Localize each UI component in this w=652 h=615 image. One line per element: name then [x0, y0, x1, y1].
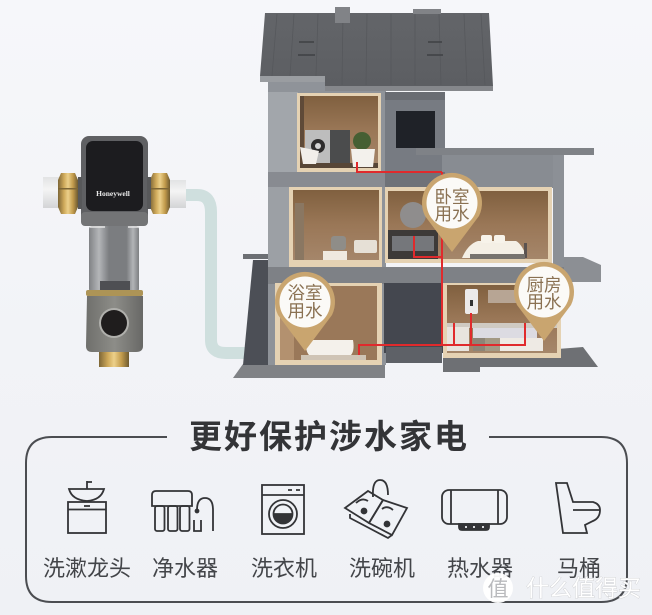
low table [323, 251, 347, 260]
washing machine [305, 130, 330, 163]
lounge chair [354, 240, 377, 253]
label: dishwasher: 洗碗机 [349, 556, 415, 581]
roof [260, 7, 493, 91]
round mirror [400, 202, 426, 228]
red water pipes [357, 162, 525, 355]
pin: bathroom [275, 272, 335, 351]
watermark: 值 [488, 578, 508, 601]
room: bedroom [385, 187, 552, 263]
icon: washing machine [262, 485, 304, 534]
basket [300, 147, 319, 164]
label: toilet: 马桶 [557, 556, 601, 581]
heading: 更好保护涉水家电 [189, 418, 469, 455]
icon: water purifier [152, 491, 213, 531]
pin: kitchen: 厨房 [526, 275, 562, 295]
label: heater: 热水器 [447, 556, 513, 581]
panel frame [26, 437, 627, 602]
water pipe [184, 195, 246, 353]
bowl [89, 226, 139, 292]
pin: bathroom: 用水 [288, 301, 323, 321]
bed [462, 235, 527, 259]
center dark wall [384, 283, 443, 363]
room: bathroom [275, 283, 382, 365]
icon: basin faucet [68, 481, 106, 533]
main wall [268, 82, 564, 365]
white pipe stubs [43, 177, 186, 208]
right ledge [560, 257, 601, 282]
label: basin faucet: 洗漱龙头 [43, 556, 131, 581]
watermark: 什么值得买 [526, 575, 641, 601]
pin: bedroom: 卧室 [434, 187, 470, 207]
water heater [465, 289, 478, 314]
house [233, 7, 601, 378]
water filter product [43, 136, 186, 367]
room: living [289, 187, 382, 267]
counter [447, 323, 557, 351]
cabinet [330, 130, 350, 163]
icon: toilet [556, 483, 600, 533]
window [396, 111, 435, 148]
vanity [388, 230, 438, 259]
chimneys [335, 7, 441, 23]
pin: bedroom: 用水 [434, 204, 470, 224]
room: kitchen [443, 283, 561, 358]
lower valve [86, 290, 143, 367]
left buttress [243, 260, 270, 365]
base slabs [233, 347, 598, 378]
skylights [298, 42, 443, 55]
range hood [488, 290, 518, 303]
pin: kitchen [514, 262, 574, 341]
watermark [483, 573, 641, 603]
brass nuts [58, 173, 170, 214]
left ledge [243, 254, 270, 259]
pin: kitchen: 用水 [526, 292, 562, 312]
bathtub [301, 340, 366, 360]
side roof [416, 148, 594, 155]
armchair [331, 236, 346, 250]
pin: bathroom: 浴室 [288, 283, 322, 303]
head [81, 136, 148, 226]
plant [351, 132, 375, 167]
right upper wall [385, 92, 564, 267]
label: purifier: 净水器 [152, 556, 218, 581]
pin: bedroom [422, 173, 482, 252]
brand: Honeywell [96, 189, 130, 198]
room: top laundry [297, 93, 381, 172]
fascia [260, 76, 493, 91]
icon: water heater [442, 490, 507, 530]
icon: dishwasher sink [345, 480, 407, 538]
label: washer: 洗衣机 [251, 556, 317, 581]
mirror stand [295, 203, 304, 260]
